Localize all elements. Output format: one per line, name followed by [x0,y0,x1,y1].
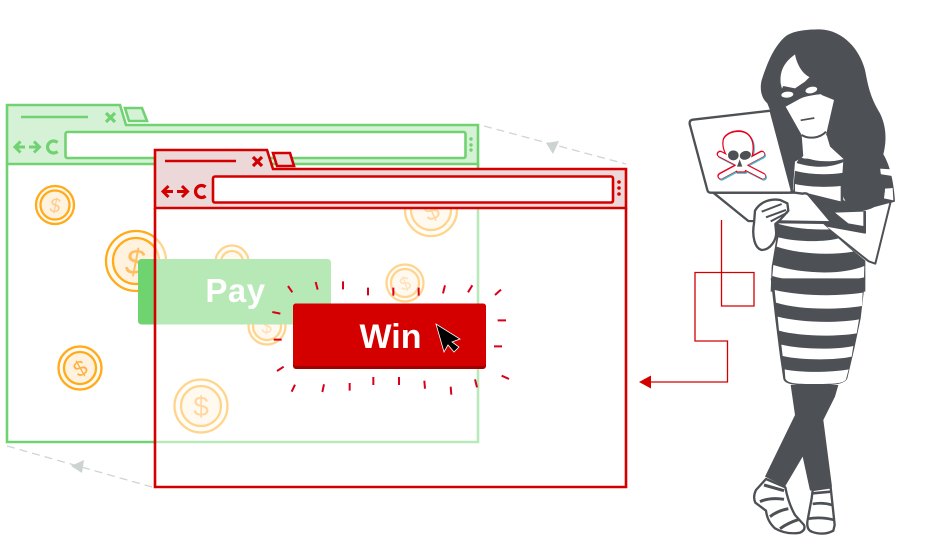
coin large [106,231,166,291]
coin [216,246,248,278]
coin [174,380,228,432]
legs [765,385,838,491]
panel: green browser window [7,105,478,442]
coin: $ [69,355,92,382]
coin [405,184,457,236]
pay button: Pay [205,272,266,309]
panel: red browser window [155,150,626,487]
coin: $ [193,391,209,422]
coin: $ [419,194,445,228]
mask [779,77,823,107]
coin [36,186,74,224]
collar line [801,158,844,163]
torso [771,158,865,292]
win button sparks [272,281,509,395]
sock left [754,479,804,533]
icon: skull and crossbones [720,131,764,177]
figure: hacker woman upper body [690,29,895,292]
hair [761,29,885,210]
arrow: red circuit connector [639,220,754,388]
hand [753,200,788,250]
win button: Win [359,318,422,356]
laptop screen [690,111,792,193]
face and neck [781,54,844,161]
coin: $ [261,317,273,338]
laptop base [713,193,832,222]
neckline [802,132,826,138]
win button [293,304,486,369]
sleeve [867,149,895,210]
coins group [36,184,457,432]
coin [248,308,286,344]
arm [823,202,891,264]
coin [58,346,102,390]
skirt [771,278,865,386]
dashed connector top with arrow [484,126,626,164]
pay button [138,259,331,324]
dashed connector bottom with arrow [7,446,152,487]
sock right [807,487,835,534]
coin [386,264,424,302]
figure: hacker woman lower body [754,278,865,534]
coin: $ [397,273,414,296]
mouth [801,118,814,120]
sleeve stripes [879,169,893,200]
coin: $ [49,196,61,217]
icon: mouse cursor [436,324,460,352]
coin large: $ [124,243,145,282]
